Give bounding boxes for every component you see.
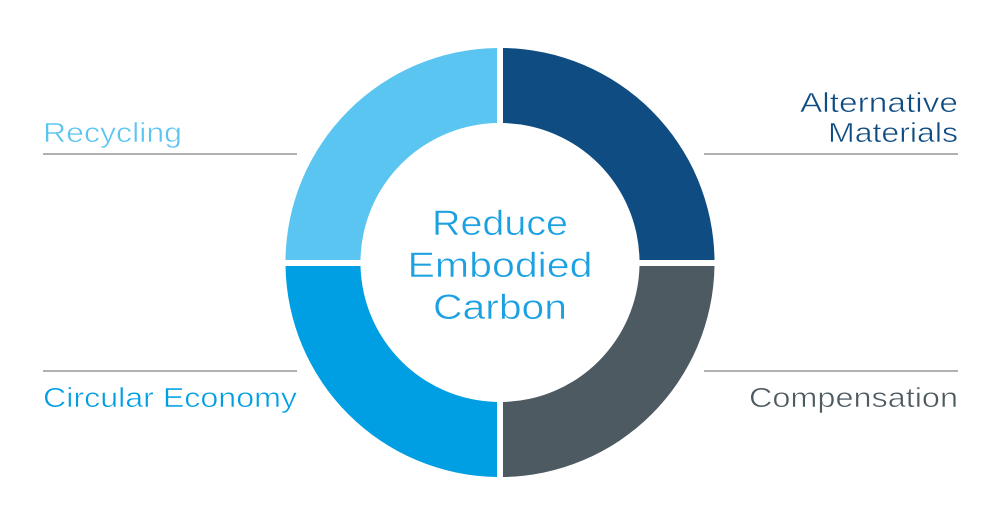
segment: Alternative Materials — [503, 48, 714, 260]
segment: Recycling — [286, 48, 497, 260]
center title: Carbon — [433, 288, 567, 327]
label: Alternative Materials: Alternative — [800, 87, 958, 118]
label: Circular Economy: Circular Economy — [43, 382, 297, 413]
center title: Embodied — [408, 246, 592, 285]
label: Compensation: Compensation — [749, 382, 958, 413]
center title: Reduce — [432, 204, 568, 243]
label: Recycling: Recycling — [43, 117, 182, 148]
label: Alternative Materials: Materials — [828, 117, 958, 148]
segment: Circular Economy — [286, 266, 497, 477]
segment: Compensation — [503, 266, 714, 477]
center title — [408, 204, 592, 327]
label: Alternative Materials — [704, 87, 958, 154]
